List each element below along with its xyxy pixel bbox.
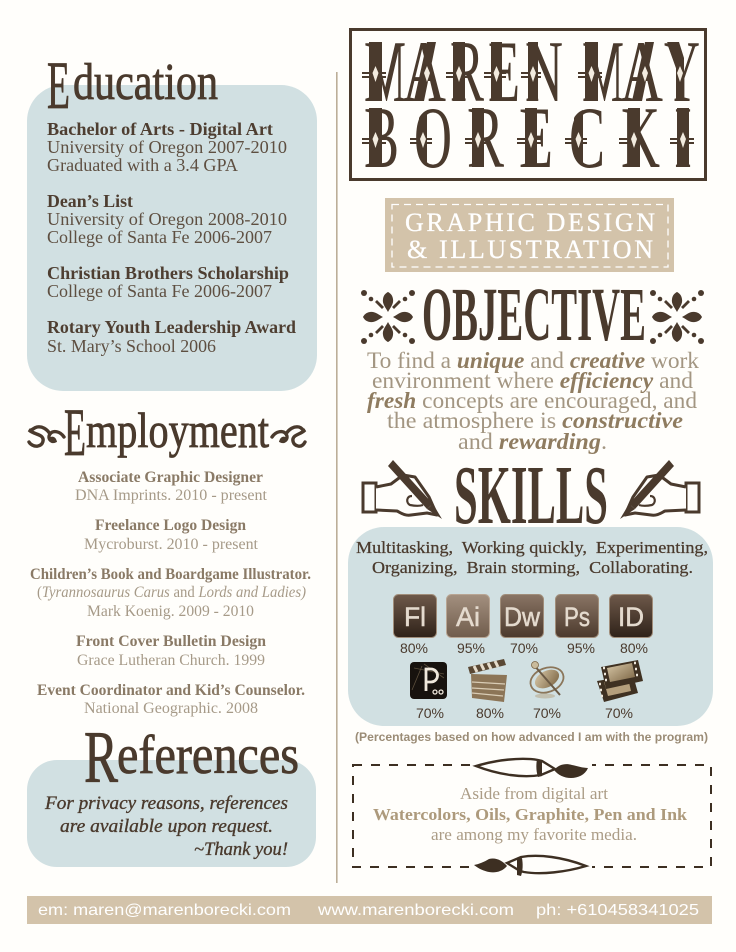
percentages row one: 95% [457,640,485,656]
icon: Fl: Fl [404,602,426,632]
name text line two: K [621,90,660,187]
employment list: Front Cover Bulletin Design [76,633,266,650]
percentages row two: 70% [533,705,561,721]
percentages row two: 80% [476,705,504,721]
heading: skills [363,449,699,542]
heading: references: eferences [117,724,299,785]
icon: top paintbrush [470,759,592,778]
name text line one: M [582,24,624,121]
percentages note: (Percentages based on how advanced I am with the program) [355,732,708,744]
column divider [336,72,338,883]
education entries: Rotary Youth Leadership Award [47,317,296,337]
references note [44,793,288,860]
subtitle badge: GRAPHIC DESIGN [405,208,655,237]
employment list: Associate Graphic Designer [78,469,263,486]
employment list: Freelance Logo Design [95,517,246,534]
percentages row one: 95% [567,640,595,656]
percentages row two [416,705,633,721]
heading: education [47,47,218,123]
references note: ~Thank you! [194,839,288,860]
name text line one: E [488,24,520,121]
subtitle badge [385,198,674,272]
icon: gyroscope [527,662,567,698]
employment list: Mark Koenig. 2009 - 2010 [87,603,254,620]
education entries: Graduated with a 3.4 GPA [47,155,238,175]
icon: Id: ID [618,602,644,632]
name text line two: B [364,90,399,187]
objective text: fresh concepts are encouraged, and [367,388,698,413]
footer contact bar: ph: +610458341025 [536,902,699,919]
employment list [30,469,311,717]
media text: Aside from digital art [460,784,608,803]
name text line one: N [525,24,563,121]
percentages row one [400,640,648,656]
icon: Dw [500,594,544,638]
name text line one: A [620,24,663,121]
icon: bottom paintbrush [470,856,592,876]
heading: employment: mployment [86,402,269,458]
education entries: Christian Brothers Scholarship [47,263,289,283]
icon: Ps [556,594,598,638]
heading: employment [29,394,305,470]
media text [373,784,688,844]
panel: media callout [353,759,711,876]
education entries: University of Oregon 2008-2010 [47,209,287,229]
education entries: University of Oregon 2007-2010 [47,137,287,157]
icon: Fl [394,594,436,638]
education entries: College of Santa Fe 2006-2007 [47,227,272,247]
percentages row one: 70% [510,640,538,656]
objective text: the atmosphere is constructive [387,408,683,433]
icon: Processing [410,662,447,699]
footer contact bar [27,896,712,924]
heading: employment: E [64,394,86,470]
icon: left flower ornament [361,290,415,344]
employment list: National Geographic. 2008 [84,700,258,717]
references note: For privacy reasons, references [44,793,288,814]
icon: clapperboard [468,659,507,702]
percentages row one: 80% [620,640,648,656]
skills list: Multitasking, Working quickly, Experimenting, [356,538,708,557]
skills list [356,538,708,577]
objective text: and rewarding. [458,429,607,454]
icon: Dw: Dw [504,602,540,632]
panel: education [27,47,317,391]
icon: Ai: Ai [456,602,480,632]
employment list: Grace Lutheran Church. 1999 [77,652,265,669]
name text line one: A [402,24,446,121]
education entries: College of Santa Fe 2006-2007 [47,281,272,301]
icon: right hand with pen [620,460,699,519]
name text line one: R [450,24,484,121]
name text line two [364,90,692,187]
icon: Ps: Ps [564,602,590,632]
icon: left flourish [29,427,64,446]
panel: references [27,717,316,867]
objective text: environment where efficiency and [372,368,693,393]
name text line one: M [364,24,406,121]
icon: film strips [597,660,643,702]
footer contact bar: www.marenborecki.com [317,902,514,919]
objective text: To find a unique and creative work [367,348,699,373]
media text: are among my favorite media. [431,825,637,844]
panel: skills [348,527,713,726]
icon: right flower ornament [650,290,704,344]
name text line two: C [569,90,605,187]
subtitle badge: & ILLUSTRATION [407,235,653,264]
skills list: Organizing, Brain storming, Collaborating. [372,558,693,577]
media text: Watercolors, Oils, Graphite, Pen and Ink [373,805,688,824]
education entries: St. Mary’s School 2006 [47,336,216,356]
footer contact bar: em: maren@marenborecki.com [38,902,291,919]
objective text [367,348,699,454]
icon: right flourish [272,427,305,446]
icon: left hand with pen [363,460,442,519]
name text line two: I [674,90,692,187]
employment list: Event Coordinator and Kid’s Counselor. [37,682,305,699]
heading: references: R [84,717,118,799]
references note: are available upon request. [60,816,273,837]
percentages row one: 80% [400,640,428,656]
icon: Ai [446,594,490,638]
icon: Id [610,594,652,638]
employment list: DNA Imprints. 2010 - present [75,487,268,504]
percentages row two: 70% [605,705,633,721]
name text line two: E [519,90,553,187]
employment list: Mycroburst. 2010 - present [84,536,259,553]
heading: education: E [47,47,70,123]
education entries [47,119,296,356]
percentages row two: 70% [416,705,444,721]
name text line one: Y [664,24,700,121]
name text line two: O [414,90,452,187]
name text line one [364,24,700,121]
employment list: (Tyrannosaurus Carus and Lords and Ladies) [37,584,306,601]
employment list: Children’s Book and Boardgame Illustrator. [30,566,311,583]
education entries: Bachelor of Arts - Digital Art [47,119,273,139]
heading: education: ducation [73,54,218,111]
education entries: Dean’s List [47,191,133,211]
letter stems and ornaments [362,42,694,167]
title: name box [350,24,706,187]
name text line two: R [467,90,504,187]
heading: references [84,717,299,799]
